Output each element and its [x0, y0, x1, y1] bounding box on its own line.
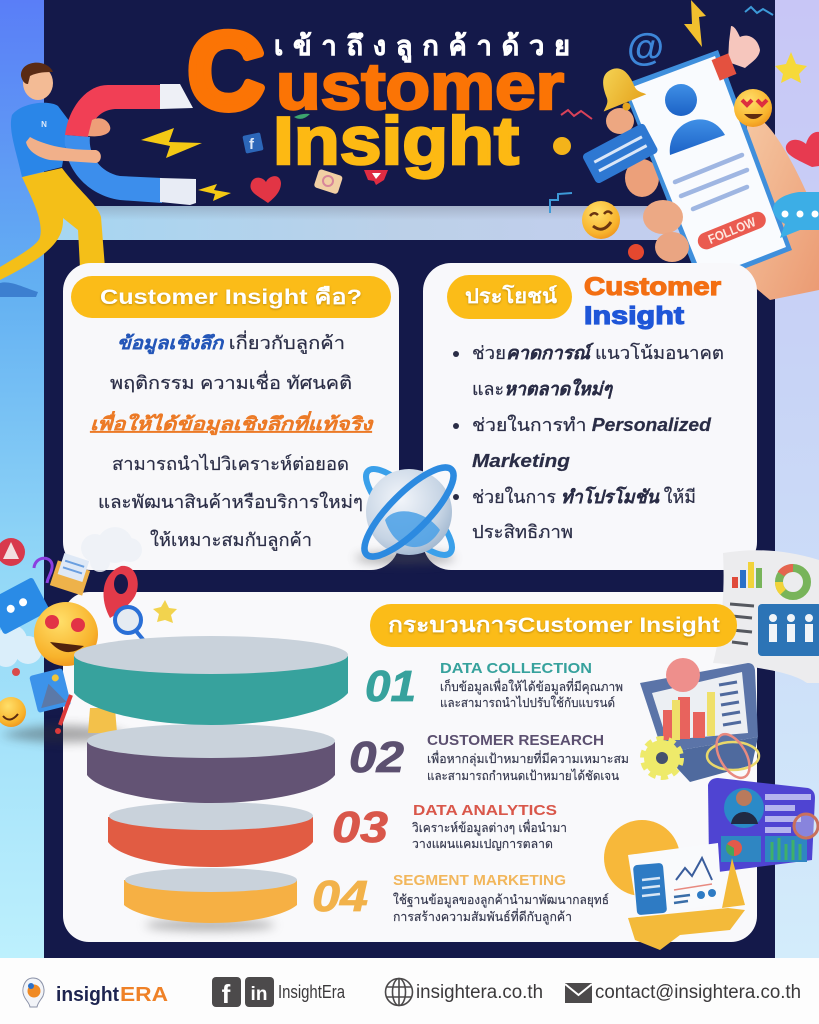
- title: Insight: Insight: [273, 103, 519, 179]
- body text: และพัฒนาสินค้าหรือบริการใหม่ๆ: [98, 491, 363, 512]
- step 02: และสามารถกำหนดเป้าหมายได้ชัดเจน: [427, 769, 619, 783]
- step 01: 01: [365, 662, 416, 711]
- hand: [740, 112, 819, 300]
- body text: ข้อมูลเชิงลึก เกี่ยวกับลูกค้า: [117, 330, 345, 355]
- play badge: [0, 538, 25, 566]
- chat bubble: [582, 122, 659, 184]
- Customer Insight label: Customer: [584, 273, 721, 301]
- follow button: [695, 209, 768, 252]
- shoe: [0, 282, 38, 297]
- facebook icon: [212, 977, 241, 1009]
- funnel tier 2: [87, 724, 335, 803]
- panel: benefits: Insight: [584, 302, 685, 330]
- card: [63, 592, 757, 942]
- finger top: [606, 108, 634, 134]
- step 04: [312, 872, 609, 925]
- bell behind funnel: [88, 708, 117, 733]
- arms and hands: [26, 137, 101, 163]
- phone body: [622, 50, 792, 285]
- thumb up: [728, 26, 760, 68]
- website: insightera.co.th: [416, 982, 543, 1003]
- funnel chart: [74, 636, 348, 931]
- step 01: เก็บข้อมูลเพื่อให้ได้ข้อมูลที่มีคุณภาพ: [440, 678, 623, 695]
- head: [23, 66, 53, 100]
- step 01: [365, 660, 623, 711]
- step 03: DATA ANALYTICS: [413, 802, 557, 819]
- panel: process: [0, 527, 819, 942]
- funnel tier 1: [74, 636, 348, 725]
- icon: phone with hand: [582, 26, 819, 300]
- illustration: analytics monitor: [640, 658, 759, 783]
- star: [153, 600, 177, 623]
- star: [775, 52, 807, 83]
- pill heading text: กระบวนการCustomer Insight: [388, 614, 720, 637]
- icon: globe with rings: [353, 456, 465, 568]
- icon: lightning bolts and social icons: f: [249, 136, 255, 153]
- footer: [23, 977, 801, 1009]
- step 01: DATA COLLECTION: [440, 660, 592, 677]
- step 03: วิเคราะห์ข้อมูลต่างๆ เพื่อนำมา: [412, 819, 567, 836]
- step 04: SEGMENT MARKETING: [393, 872, 566, 889]
- step 02: CUSTOMER RESEARCH: [427, 732, 604, 749]
- step 03: วางแผนแคมเปญการตลาด: [412, 837, 553, 851]
- chat icon: [0, 576, 57, 644]
- cuff: [712, 53, 736, 81]
- icon: lightning bolts and social icons: [141, 0, 773, 213]
- benefit list: ช่วยในการทำ Personalized: [472, 414, 712, 435]
- magnet: [65, 85, 160, 137]
- funnel tier 3: [108, 802, 313, 867]
- logo: insight: [56, 984, 119, 1006]
- illustration: chart document: [713, 550, 819, 683]
- gear: [643, 739, 681, 777]
- icon: lightning bolts and social icons: @: [627, 27, 664, 69]
- step 02: เพื่อหากลุ่มเป้าหมายที่มีความเหมาะสม: [427, 750, 629, 767]
- title: big C: C: [188, 10, 264, 131]
- exclamation mark: [60, 695, 71, 725]
- benefit list: และหาตลาดใหม่ๆ: [472, 378, 613, 399]
- card: [423, 263, 757, 570]
- speech bubble dots: [773, 192, 819, 238]
- step 04: 04: [312, 872, 368, 921]
- magnifier: [115, 607, 141, 633]
- step 03: 03: [332, 803, 388, 852]
- panel: benefits: [423, 263, 757, 570]
- step 03: [332, 802, 567, 852]
- title: [188, 10, 570, 179]
- profile lines: [675, 155, 747, 209]
- benefit list: [472, 342, 724, 542]
- benefit list: ช่วยคาดการณ์ แนวโน้มอนาคต: [472, 342, 724, 363]
- small emoji: [0, 697, 26, 727]
- legs: [0, 168, 105, 280]
- step 04: ใช้ฐานข้อมูลของลูกค้านำมาพัฒนากลยุทธ์: [393, 893, 609, 908]
- illustration: man holding magnet: N: [41, 120, 47, 129]
- card: [63, 263, 399, 570]
- linkedin icon: [245, 977, 274, 1007]
- profile icon: [665, 84, 697, 116]
- step 04: การสร้างความสัมพันธ์ที่ดีกับลูกค้า: [393, 908, 572, 925]
- pill heading: [71, 276, 391, 318]
- body text: ให้เหมาะสมกับลูกค้า: [150, 529, 312, 551]
- panel: what is customer insight: [63, 263, 399, 570]
- body text: [90, 330, 375, 551]
- bell: [590, 61, 649, 119]
- finger middle: [625, 159, 659, 197]
- step 02: 02: [349, 733, 405, 782]
- follow button: FOLLOW: [706, 214, 758, 247]
- envelope: [50, 552, 93, 596]
- pill heading text: ประโยชน์: [465, 284, 557, 308]
- step 02: [349, 732, 629, 783]
- email: contact@insightera.co.th: [595, 982, 801, 1003]
- benefit list: ประสิทธิภาพ: [472, 522, 573, 542]
- location pin: [104, 566, 138, 618]
- body text: เพื่อให้ได้ข้อมูลเชิงลึกที่แท้จริง: [90, 411, 375, 436]
- step 01: และสามารถนำไปปรับใช้กับแบรนด์: [440, 696, 615, 710]
- title: thai heading: เข้าถึงลูกค้าด้วย: [274, 31, 570, 63]
- bullets: [453, 351, 459, 500]
- picture icon: [29, 668, 71, 713]
- illustration: man holding magnet: [0, 63, 196, 297]
- emoji heart eyes: [34, 602, 98, 666]
- mail icon: [565, 983, 592, 1003]
- fingers: [643, 200, 683, 234]
- illustration: profile dashboard: [708, 778, 818, 872]
- illustration: left social icons cluster: [0, 527, 177, 742]
- question mark: [34, 558, 52, 583]
- heart: [786, 132, 819, 167]
- globe icon: [386, 978, 412, 1006]
- body text: สามารถนำไปวิเคราะห์ต่อยอด: [112, 453, 349, 474]
- benefit list: ช่วยในการ ทำโปรโมชัน ให้มี: [472, 486, 696, 507]
- logo: ERA: [120, 984, 168, 1006]
- pill heading: [370, 604, 737, 647]
- linkedin handle: InsightEra: [278, 982, 346, 1002]
- illustration: marketing dashboard: [604, 820, 745, 950]
- facebook icon: f: [222, 979, 231, 1009]
- atom rings: [707, 742, 759, 770]
- emoji heart eyes: [734, 89, 772, 127]
- benefit list: Marketing: [472, 451, 570, 471]
- logo: [23, 978, 168, 1007]
- pill heading text: Customer Insight คือ?: [100, 285, 362, 309]
- pin hole: [114, 574, 128, 594]
- title: ustomer: ustomer: [276, 49, 564, 123]
- pill heading: [447, 275, 572, 319]
- linkedin icon: in: [251, 984, 267, 1005]
- emoji smile: [582, 201, 620, 239]
- funnel tier 4: [124, 868, 297, 931]
- body text: พฤติกรรม ความเชื่อ ทัศนคติ: [110, 370, 352, 393]
- shirt: [11, 103, 70, 177]
